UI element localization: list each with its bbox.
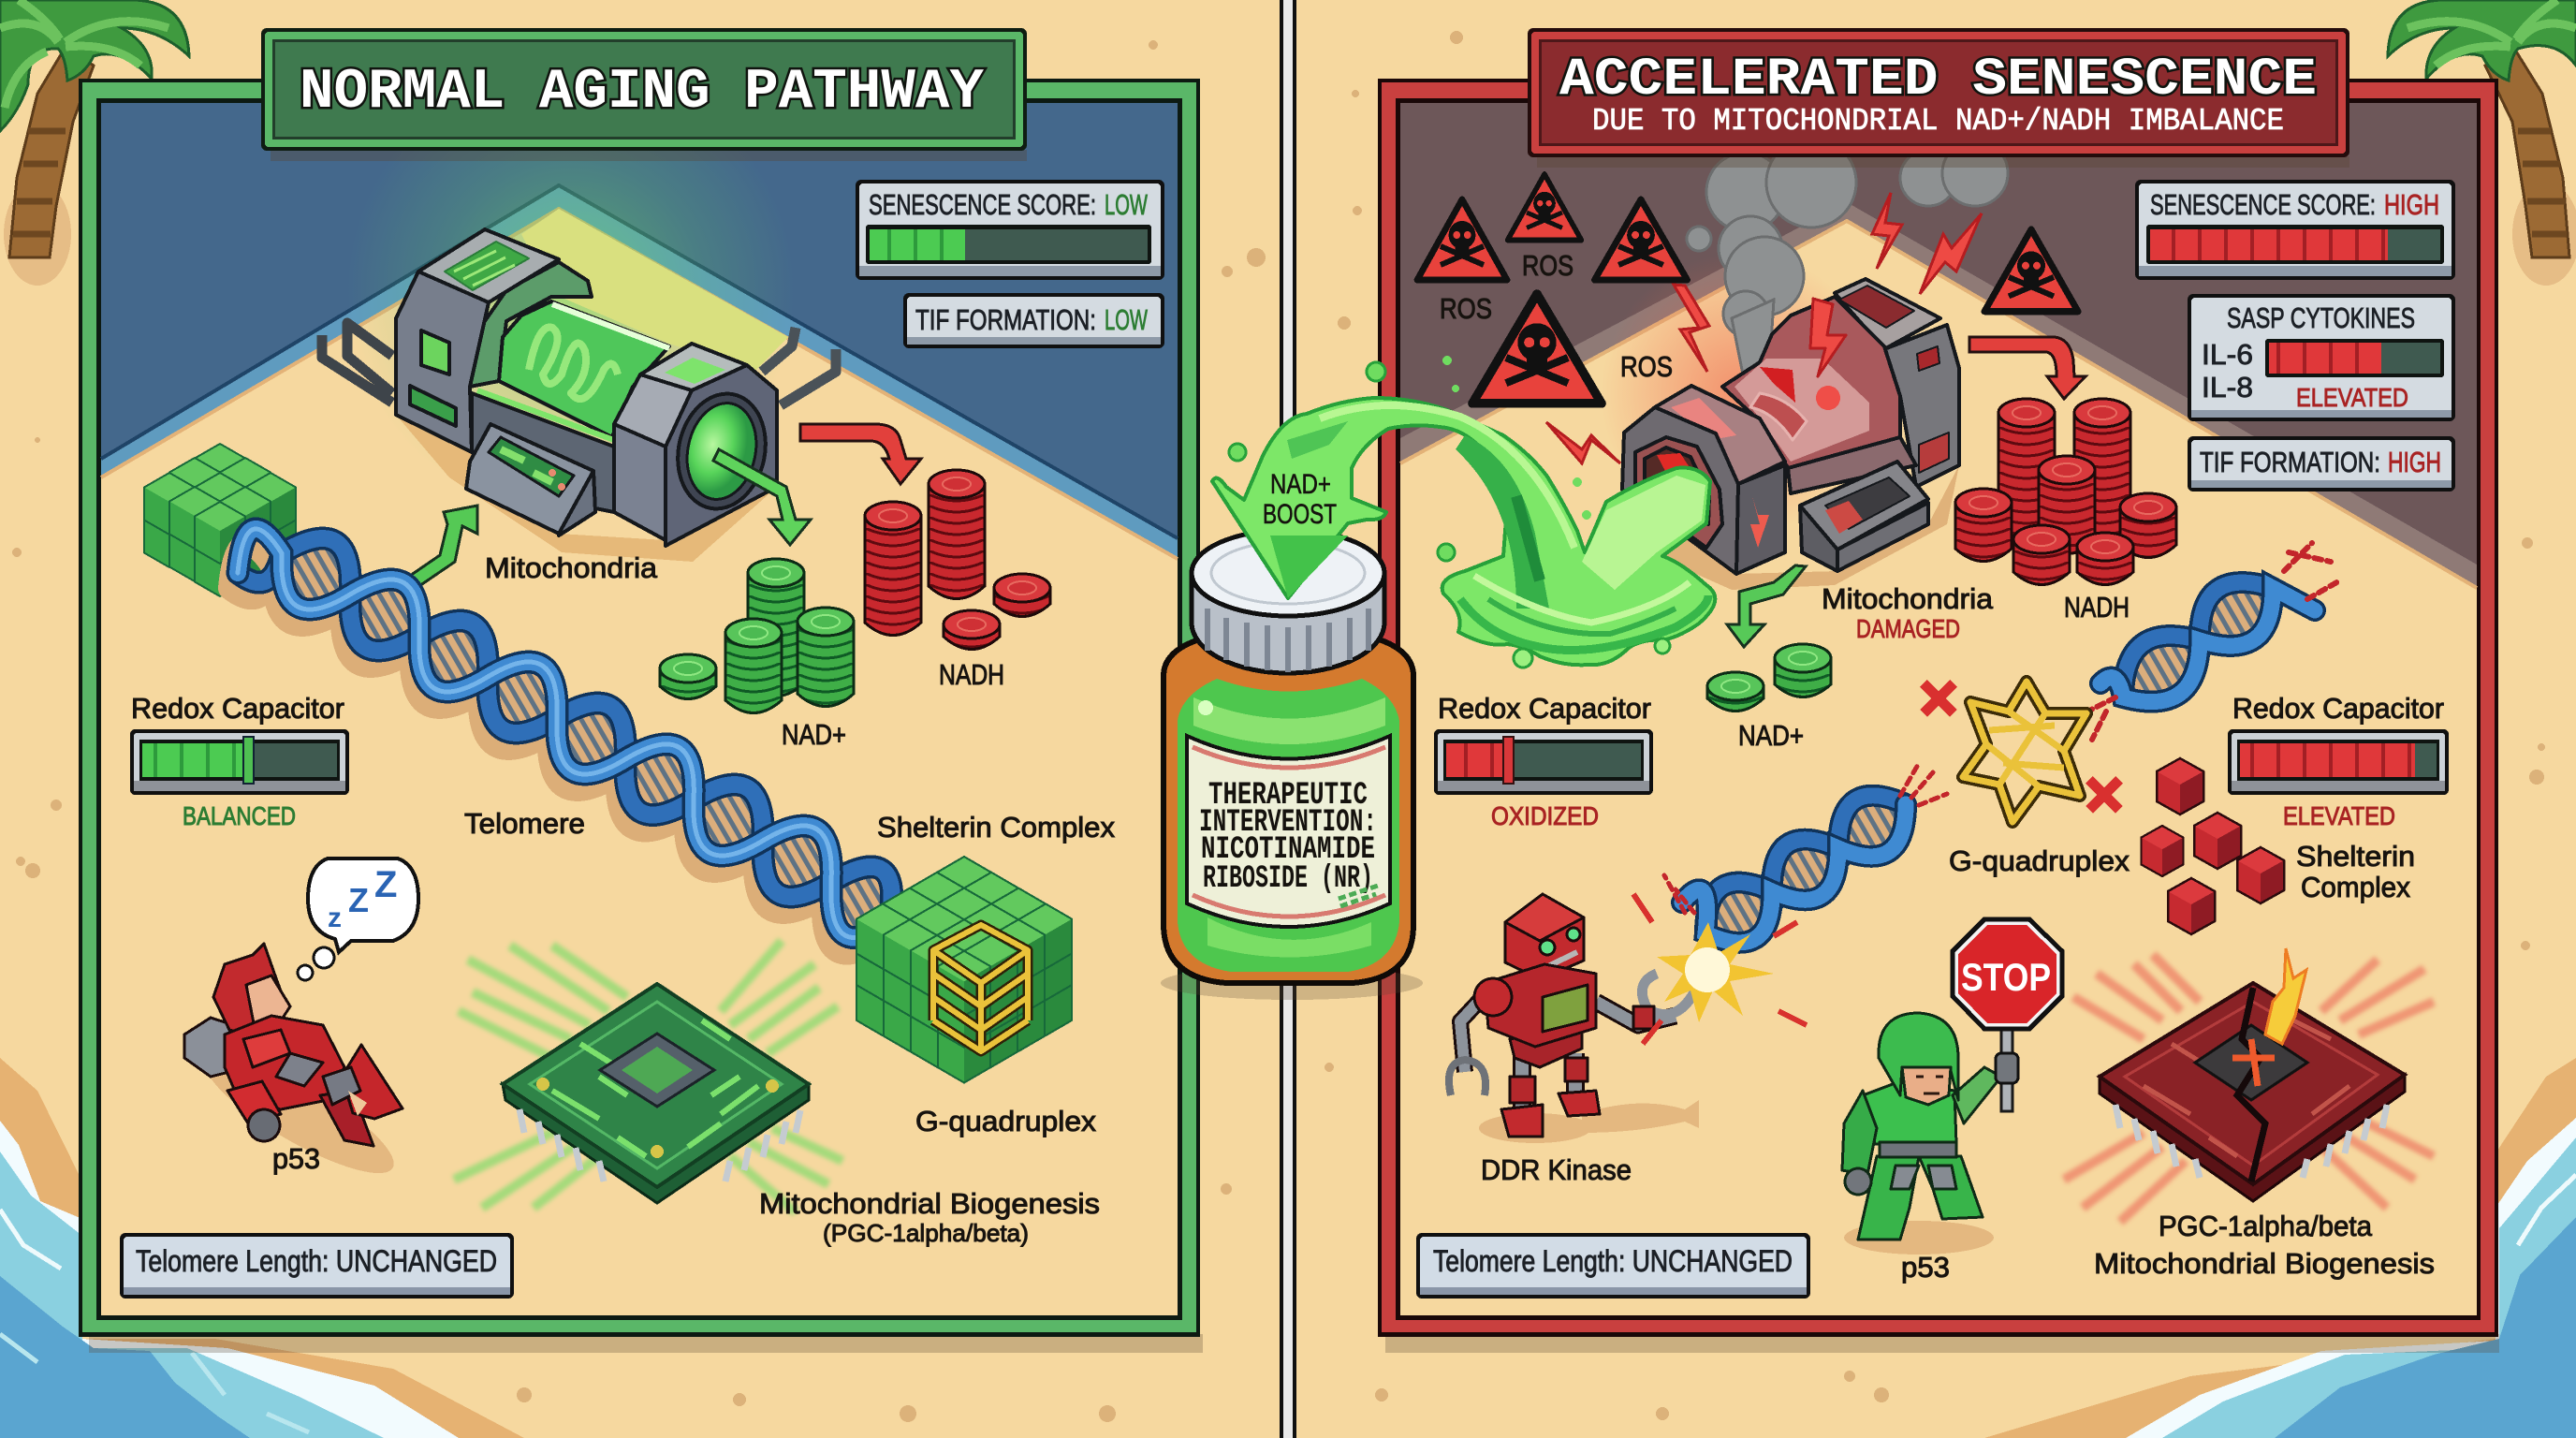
- labels: normal pathway: G-quadruplex: [915, 1105, 1097, 1137]
- icon: telomere DNA double helix: [230, 529, 892, 953]
- labels: senescence pathway: ROS: [1440, 292, 1492, 325]
- labels: normal pathway: Mitochondria: [485, 551, 658, 584]
- NAD+ boost text: NAD+: [1270, 469, 1331, 500]
- gauge: redox capacitor balanced: BALANCED: [183, 801, 296, 830]
- jar body: [1164, 635, 1413, 983]
- icon: NAD+ green coin stacks: [1707, 644, 1831, 712]
- labels: senescence pathway: Mitochondrial Biogenesis: [2094, 1247, 2435, 1280]
- icon: damaged mitochondria reactor: [1622, 279, 1959, 590]
- labels: senescence pathway: NADH: [2064, 591, 2130, 624]
- labels: senescence pathway: p53: [1901, 1251, 1950, 1284]
- arrow: reactor to NAD+: [1727, 565, 1806, 647]
- icon: broken telomere helix upper: [2087, 543, 2340, 740]
- banner: normal aging pathway title: [261, 28, 1027, 161]
- panel frame and floor: [79, 79, 1203, 1353]
- icon: red crosses: [1924, 683, 2119, 810]
- blue isometric back wall: [101, 66, 1178, 559]
- icon: NADH red coin stacks: [865, 470, 1050, 650]
- labels: senescence pathway: G-quadruplex: [1949, 844, 2130, 877]
- labels: senescence pathway: DAMAGED: [1856, 614, 1960, 643]
- banner: normal aging pathway title: NORMAL AGING PATHWAY: [300, 61, 984, 125]
- icon: burned-out biogenesis chip: [2064, 955, 2434, 1222]
- labels: senescence pathway: Shelterin: [2296, 840, 2415, 873]
- labels: normal pathway: Mitochondrial Biogenesis: [759, 1187, 1100, 1220]
- gauge: redox capacitor oxidized: Redox Capacitor: [1438, 692, 1651, 725]
- bottle: therapeutic intervention nicotinamide riboside: THERAPEUTIC: [1208, 778, 1368, 814]
- divider between the two panels: [1280, 0, 1296, 1438]
- gauge: redox capacitor elevated: [2228, 692, 2449, 830]
- icon: NADH red coin stacks: [1955, 399, 2176, 584]
- icon: healthy mitochondria reactor: [322, 209, 836, 562]
- icon: green p53 guard: [1842, 1013, 2001, 1255]
- status: TIF formation high: [2188, 436, 2455, 492]
- palm tree: left: [0, 0, 189, 286]
- panel: normal aging pathway: [79, 66, 1203, 1353]
- speech bubble: snoring zZZ: Z: [374, 864, 397, 905]
- bar: [866, 225, 1151, 264]
- labels: senescence pathway: Mitochondria: [1822, 582, 1994, 615]
- NAD+ boost slime arrow and stream: [1212, 356, 1715, 668]
- status: telomere length unchanged: [120, 1233, 514, 1299]
- icon: flame on chip: [2265, 948, 2306, 1044]
- arrow: DNA to mitochondria: [407, 506, 477, 588]
- label: [1187, 736, 1390, 927]
- labels: normal pathway: (PGC-1alpha/beta): [823, 1219, 1029, 1247]
- bottle: therapeutic intervention nicotinamide riboside: INTERVENTION:: [1199, 805, 1377, 841]
- value: LOW: [1105, 188, 1148, 221]
- gauge: redox capacitor balanced: Redox Capacitor: [131, 692, 344, 725]
- labels: senescence pathway: Complex: [2301, 871, 2410, 903]
- arrow: portal to NAD+: [713, 449, 811, 545]
- gauge: SASP cytokines elevated: IL-8: [2202, 371, 2253, 404]
- labels: normal pathway: [272, 551, 1115, 1247]
- gauge: redox capacitor elevated: Redox Capacitor: [2232, 692, 2444, 725]
- icon: ROS hazard triangles: [1417, 174, 2078, 404]
- labels: senescence pathway: ROS: [1522, 249, 1573, 282]
- icon: stop sign: [1953, 919, 2062, 1111]
- gauge: SASP cytokines elevated: SASP CYTOKINES: [2227, 301, 2415, 334]
- icon: shelterin complex cubes with G-quadruplex frame: [856, 857, 1072, 1082]
- labels: senescence pathway: [1440, 249, 2435, 1284]
- arrow: reactor to NADH: [800, 424, 921, 484]
- icon: scattered shelterin red cubes: [2141, 758, 2284, 934]
- arrow: reactor to NADH: [1969, 337, 2086, 399]
- speech bubble: snoring zZZ: z: [328, 902, 342, 933]
- status: TIF formation high: TIF FORMATION:: [2200, 446, 2380, 478]
- speech bubble: snoring zZZ: [298, 858, 418, 980]
- gauge: senescence score high: HIGH: [2384, 188, 2439, 221]
- green liquid: [1178, 679, 1399, 972]
- status: telomere length unchanged: Telomere Length: UNCHANGED: [1433, 1244, 1793, 1278]
- labels: senescence pathway: ROS: [1620, 350, 1673, 383]
- labels: normal pathway: Telomere: [464, 807, 585, 840]
- icon: shelterin cube cluster at telomere start: [144, 444, 296, 596]
- icon: broken telomere helix lower: [1664, 763, 1947, 943]
- gauge: redox capacitor oxidized: [1434, 692, 1653, 830]
- G-quadruplex yellow frame: [933, 925, 1028, 1051]
- palm tree: right: [2388, 0, 2576, 286]
- status: TIF formation low: LOW: [1105, 303, 1148, 336]
- banner: accelerated senescence title: ACCELERATED SENESCENCE: [1559, 51, 2317, 110]
- ocean: lower right corner: [1984, 1058, 2576, 1438]
- bottle: therapeutic intervention nicotinamide riboside: RIBOSIDE (NR): [1203, 861, 1373, 897]
- status: TIF formation high: HIGH: [2388, 446, 2441, 478]
- icon: spark where kinase cuts telomere: [1633, 894, 1807, 1044]
- gauge: SASP cytokines elevated: [2188, 294, 2455, 421]
- bottle cap: [1192, 573, 1384, 673]
- gauge: SASP cytokines elevated: IL-6: [2202, 338, 2253, 371]
- icon: unfolded G-quadruplex: [1963, 682, 2086, 822]
- status: telomere length unchanged: Telomere Length: UNCHANGED: [136, 1244, 497, 1278]
- panel frame and floor: [1378, 79, 2499, 1353]
- labels: normal pathway: NAD+: [782, 718, 846, 751]
- gauge: senescence score low: [856, 180, 1164, 280]
- labels: normal pathway: Shelterin Complex: [877, 811, 1115, 844]
- labels: senescence pathway: DDR Kinase: [1481, 1153, 1632, 1186]
- bottle: therapeutic intervention nicotinamide riboside: [1161, 530, 1423, 1000]
- labels: normal pathway: NADH: [939, 658, 1004, 691]
- icon: sleeping p53 in red armour: [184, 944, 407, 1192]
- status: TIF formation low: TIF FORMATION:: [915, 303, 1096, 336]
- icon: DDR kinase robot: [1449, 894, 1699, 1143]
- icon: stop sign: STOP: [1961, 955, 2051, 999]
- gauge: redox capacitor oxidized: OXIDIZED: [1491, 801, 1599, 830]
- gauge: senescence score high: [2135, 180, 2455, 280]
- gauge: redox capacitor balanced: [130, 692, 349, 830]
- banner: accelerated senescence title: DUE TO MITOCHONDRIAL NAD+/NADH IMBALANCE: [1592, 104, 2284, 139]
- icon: NAD+ green coin stacks: [660, 559, 854, 713]
- icon: smoke plume from reactor: [1687, 138, 2008, 374]
- NAD+ boost text: [1263, 469, 1337, 530]
- shelterin green cubes: [856, 857, 1072, 1082]
- gauge: senescence score high: SENESCENCE SCORE:: [2150, 188, 2376, 221]
- status: TIF formation low: [903, 293, 1164, 348]
- ocean: lower left corner: [0, 1058, 524, 1438]
- panel: accelerated senescence: [1378, 79, 2499, 1353]
- speech bubble: snoring zZZ: Z: [348, 881, 369, 919]
- status: telomere length unchanged: [1416, 1233, 1810, 1299]
- label: SENESCENCE SCORE:: [869, 188, 1096, 221]
- icon: red lightning bolts: [1546, 193, 1982, 463]
- NAD+ boost text: BOOST: [1263, 499, 1337, 530]
- bottle: therapeutic intervention nicotinamide riboside: NICOTINAMIDE: [1201, 832, 1375, 868]
- icon: healthy mitochondrial biogenesis chip: [454, 941, 842, 1212]
- brown isometric back wall: [1400, 103, 2477, 588]
- gauge: SASP cytokines elevated: ELEVATED: [2296, 383, 2408, 412]
- labels: senescence pathway: PGC-1alpha/beta: [2159, 1210, 2373, 1242]
- labels: senescence pathway: NAD+: [1738, 719, 1804, 752]
- gauge: redox capacitor elevated: ELEVATED: [2283, 801, 2395, 830]
- labels: normal pathway: p53: [272, 1142, 320, 1175]
- banner: accelerated senescence title: [1528, 28, 2349, 168]
